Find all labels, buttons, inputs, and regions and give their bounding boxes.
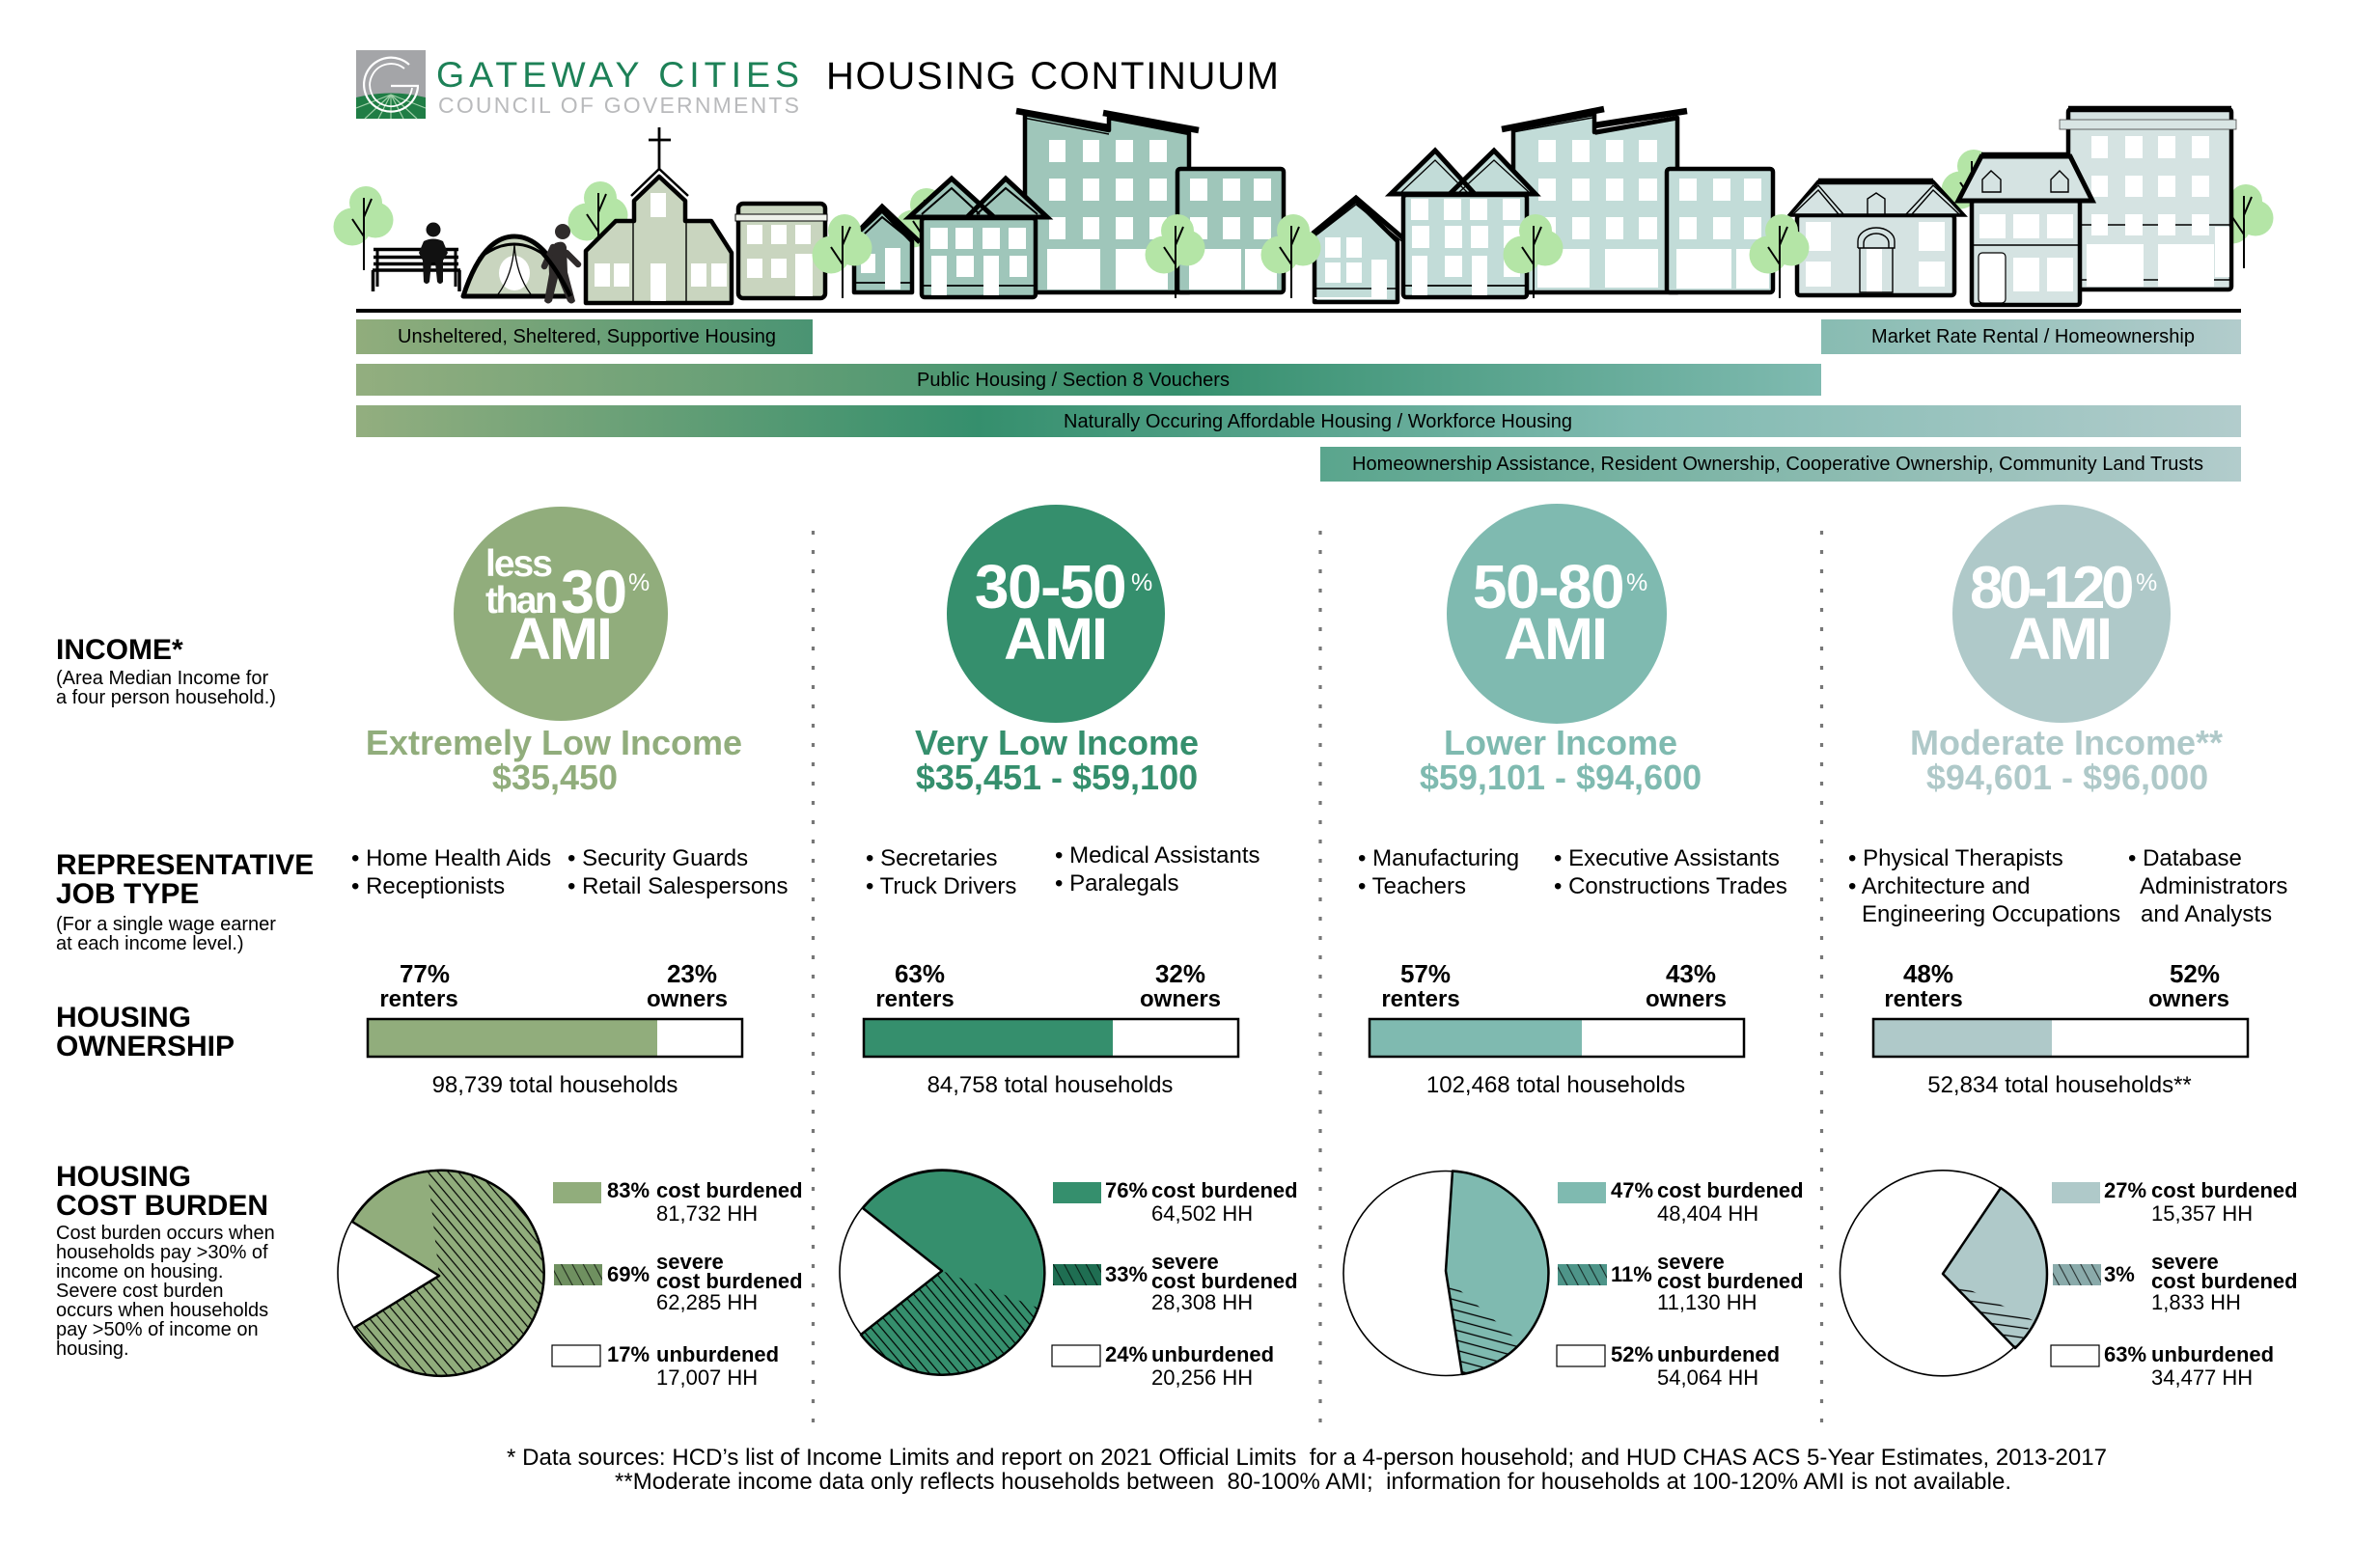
legend: 24% (1105, 1342, 1148, 1366)
AMI badge (947, 505, 1165, 723)
panel: very low income (840, 505, 1298, 1390)
legend: 15,357 HH (2151, 1201, 2253, 1226)
income level (1910, 723, 2223, 797)
legend: unburdened (2151, 1342, 2274, 1366)
legend: 33% (1105, 1262, 1148, 1286)
income level: Lower Income (1444, 723, 1677, 762)
ownership bar: 52% (2170, 959, 2220, 988)
row label: housing cost burden (56, 1161, 275, 1360)
bench with seated person (373, 222, 460, 291)
building green right (1177, 169, 1284, 292)
bar: public housing (356, 364, 1821, 396)
row label: housing cost burden: housing. (56, 1338, 129, 1360)
AMI badge: than (485, 580, 556, 621)
AMI badge: 30-50 (975, 552, 1125, 621)
AMI badge: 50-80 (1473, 552, 1623, 621)
bar: market rate (1821, 319, 2241, 354)
AMI badge: AMI (1004, 606, 1106, 672)
row label: income (56, 634, 276, 708)
legend: 64,502 HH (1151, 1201, 1253, 1226)
panel: moderate income (1840, 505, 2298, 1390)
ownership bar: owners (647, 986, 728, 1012)
job types: • Secretaries (866, 845, 997, 871)
job types: • Manufacturing (1358, 845, 1519, 871)
bar: unsheltered, sheltered, supportive housing: Unsheltered, Sheltered, Supportive Housing (398, 326, 776, 347)
row label: housing ownership: HOUSING (56, 1002, 191, 1034)
legend: cost burdened (1151, 1178, 1298, 1202)
income level: Very Low Income (915, 723, 1199, 762)
legend (1557, 1178, 1804, 1390)
legend: 63% (2104, 1342, 2146, 1366)
bar: public housing: Public Housing / Section 8 Vouchers (917, 370, 1230, 391)
panel: lower income (1343, 504, 1804, 1390)
AMI badge: % (2136, 569, 2157, 596)
column dividers (813, 531, 1822, 1428)
row label: housing cost burden: Severe cost burden (56, 1281, 223, 1302)
tent (463, 236, 570, 296)
ownership bar: renters (1381, 986, 1460, 1012)
legend: 28,308 HH (1151, 1290, 1253, 1314)
bar: market rate: Market Rate Rental / Homeownership (1871, 326, 2195, 347)
income level (915, 723, 1199, 797)
title: HOUSING CONTINUUM (826, 55, 1279, 97)
small house green (854, 207, 920, 292)
job types: • Security Guards (567, 845, 748, 871)
legend: cost burdened (1657, 1178, 1804, 1202)
mansard row house (1958, 155, 2092, 305)
apartment building beige (735, 204, 827, 298)
legend: 34,477 HH (2151, 1365, 2253, 1390)
tree between clusters (1260, 214, 1320, 298)
AMI badge: % (628, 569, 650, 596)
big building teal (1502, 109, 1687, 292)
row label: housing cost burden: occurs when households (56, 1300, 268, 1321)
legend: 81,732 HH (656, 1201, 758, 1226)
AMI badge (454, 507, 668, 721)
AMI badge (1952, 505, 2171, 723)
row label: housing cost burden: Cost burden occurs when (56, 1223, 275, 1244)
job types: • Constructions Trades (1554, 873, 1787, 899)
tree behind mansard house (1942, 150, 2002, 234)
small house teal (1313, 198, 1410, 302)
legend: 11,130 HH (1657, 1290, 1757, 1314)
job types (1358, 845, 1787, 899)
ownership bar: 77% (400, 959, 450, 988)
legend: 52% (1611, 1342, 1653, 1366)
row label: representative job type: JOB TYPE (56, 878, 199, 910)
job types: Engineering Occupations (1862, 901, 2120, 927)
legend: 69% (607, 1262, 650, 1286)
row label: income: (Area Median Income for (56, 668, 268, 689)
row label: housing cost burden: pay >50% of income on (56, 1319, 259, 1340)
legend: cost burdened (1657, 1269, 1804, 1293)
logo: Gateway Cities Council of Governments (356, 50, 799, 119)
mansard house with arch door (1789, 181, 1964, 295)
twin gable house green (909, 179, 1047, 297)
housing type bars (356, 319, 2241, 482)
legend: cost burdened (656, 1178, 803, 1202)
ownership bar: 63% (895, 959, 945, 988)
legend: 17,007 HH (656, 1365, 758, 1390)
bar: naturally occurring affordable housing (356, 405, 2241, 437)
AMI badge: % (1131, 569, 1152, 596)
legend: 3% (2104, 1262, 2135, 1286)
legend: 83% (607, 1178, 650, 1202)
job types: • Executive Assistants (1554, 845, 1780, 871)
legend: severe (1657, 1250, 1725, 1274)
church (586, 127, 732, 303)
ownership bar: owners (1646, 986, 1727, 1012)
row label: housing cost burden: income on housing. (56, 1261, 223, 1282)
tree before mansard house (1749, 214, 1809, 298)
legend: 76% (1105, 1178, 1148, 1202)
row label: representative job type: REPRESENTATIVE (56, 849, 314, 881)
job types: • Receptionists (351, 873, 505, 899)
legend (552, 1178, 803, 1390)
footnotes: **Moderate income data only reflects households between 80-100% AMI; information for households at 100-120% AMI is not available. (615, 1469, 2011, 1495)
legend (1052, 1178, 1298, 1390)
ownership bar (864, 959, 1238, 1098)
ownership bar: 52,834 total households** (1927, 1072, 2192, 1098)
legend: cost burdened (656, 1269, 803, 1293)
walking person (542, 224, 578, 303)
income level: Moderate Income** (1910, 723, 2223, 762)
bar: unsheltered, sheltered, supportive housing (356, 319, 813, 354)
legend: 20,256 HH (1151, 1365, 1253, 1390)
AMI badge: 30 (561, 559, 626, 626)
panel: extremely low income (338, 507, 803, 1390)
pie chart (840, 1170, 1044, 1375)
AMI badge (1447, 504, 1667, 724)
job types: • Physical Therapists (1848, 845, 2063, 871)
legend: 62,285 HH (656, 1290, 758, 1314)
row label: housing cost burden: households pay >30% of (56, 1242, 268, 1263)
ownership bar: 57% (1400, 959, 1451, 988)
row label: housing cost burden: COST BURDEN (56, 1190, 268, 1222)
legend: unburdened (656, 1342, 779, 1366)
income level: $35,451 - $59,100 (916, 758, 1198, 797)
ownership bar: 48% (1903, 959, 1953, 988)
footnotes: * Data sources: HCD’s list of Income Limits and report on 2021 Official Limits for a 4-person household; and HUD CHAS ACS 5-Year Estimates, 2013-2017 (507, 1445, 2107, 1471)
legend: severe (656, 1250, 724, 1274)
ownership bar (1370, 959, 1744, 1098)
income level: $35,450 (492, 758, 618, 797)
ownership bar: 84,758 total households (927, 1072, 1173, 1098)
AMI badge: less (485, 543, 552, 585)
row label: representative job type (56, 849, 314, 954)
legend: 27% (2104, 1178, 2146, 1202)
row label: housing cost burden: HOUSING (56, 1161, 191, 1193)
legend: 17% (607, 1342, 650, 1366)
income level: $59,101 - $94,600 (1420, 758, 1702, 797)
legend: unburdened (1151, 1342, 1274, 1366)
logo: Gateway Cities Council of Governments: COUNCIL OF GOVERNMENTS (438, 93, 799, 118)
legend: cost burdened (2151, 1178, 2298, 1202)
job types: • Medical Assistants (1055, 842, 1259, 868)
tree in front of green building (1145, 214, 1204, 298)
tree behind houses (894, 188, 954, 272)
ownership bar: renters (875, 986, 955, 1012)
legend: cost burdened (1151, 1269, 1298, 1293)
bar: naturally occurring affordable housing: Naturally Occuring Affordable Housing / Workforce Housing (1064, 411, 1572, 432)
job types: and Analysts (2141, 901, 2272, 927)
job types (866, 842, 1259, 899)
tree in front (813, 214, 872, 298)
ownership bar: 43% (1666, 959, 1716, 988)
bar: homeownership assistance: Homeownership Assistance, Resident Ownership, Cooperative Ownership, Community Land Trusts (1352, 454, 2203, 475)
row label: income: INCOME* (56, 634, 183, 666)
row label: housing ownership (56, 1002, 235, 1062)
AMI badge: % (1626, 569, 1647, 596)
legend: 48,404 HH (1657, 1201, 1758, 1226)
AMI badge: 80-120 (1970, 555, 2132, 621)
AMI badge: AMI (1504, 606, 1606, 672)
ownership bar: 23% (667, 959, 717, 988)
ownership bar: 32% (1155, 959, 1205, 988)
AMI badge: AMI (509, 606, 611, 672)
ownership bar (1873, 959, 2248, 1098)
row label: income: a four person household.) (56, 687, 276, 708)
legend: 54,064 HH (1657, 1365, 1758, 1390)
footnotes (507, 1445, 2107, 1495)
pie chart (1343, 1172, 1548, 1376)
job types (351, 845, 789, 899)
pie chart (1840, 1171, 2047, 1376)
row label: representative job type: at each income level.) (56, 933, 244, 954)
logo: Gateway Cities Council of Governments: GATEWAY CITIES (436, 54, 799, 95)
ownership bar: 102,468 total households (1426, 1072, 1685, 1098)
pie chart (338, 1170, 544, 1376)
ownership bar: owners (2148, 986, 2229, 1012)
job types: • Database (2128, 845, 2242, 871)
big building green (1016, 111, 1199, 292)
legend: cost burdened (2151, 1269, 2298, 1293)
ownership bar: 98,739 total households (432, 1072, 678, 1098)
legend: severe (1151, 1250, 1219, 1274)
illustration: neighborhood skyline (334, 109, 2274, 313)
legend: severe (2151, 1250, 2219, 1274)
legend: 1,833 HH (2151, 1290, 2241, 1314)
job types: • Home Health Aids (351, 845, 551, 871)
job types (1848, 845, 2287, 927)
ownership bar: owners (1140, 986, 1221, 1012)
job types: • Architecture and (1848, 873, 2031, 899)
job types: • Paralegals (1055, 870, 1178, 896)
income level (366, 723, 742, 797)
income level: $94,601 - $96,000 (1926, 758, 2208, 797)
tree at far right (2214, 184, 2274, 268)
legend: 47% (1611, 1178, 1653, 1202)
row label: housing ownership: OWNERSHIP (56, 1031, 235, 1062)
bar: homeownership assistance (1320, 447, 2241, 482)
job types: • Truck Drivers (866, 873, 1016, 899)
tree (334, 186, 394, 270)
job types: • Teachers (1358, 873, 1466, 899)
income level (1420, 723, 1702, 797)
legend: unburdened (1657, 1342, 1780, 1366)
income level: Extremely Low Income (366, 723, 742, 762)
job types: Administrators (2140, 873, 2287, 899)
tree in front of teal building (1504, 214, 1564, 298)
building teal right (1667, 169, 1773, 292)
ownership bar (368, 959, 742, 1098)
legend (2051, 1178, 2298, 1390)
ground line (356, 309, 2241, 313)
legend: 11% (1611, 1262, 1652, 1286)
job types: • Retail Salespersons (567, 873, 789, 899)
row label: representative job type: (For a single wage earner (56, 914, 276, 935)
tall building light (2060, 109, 2236, 290)
tree behind church (567, 181, 627, 265)
twin gable house teal (1391, 151, 1536, 297)
AMI badge: AMI (2008, 606, 2111, 672)
ownership bar: renters (379, 986, 458, 1012)
ownership bar: renters (1884, 986, 1963, 1012)
